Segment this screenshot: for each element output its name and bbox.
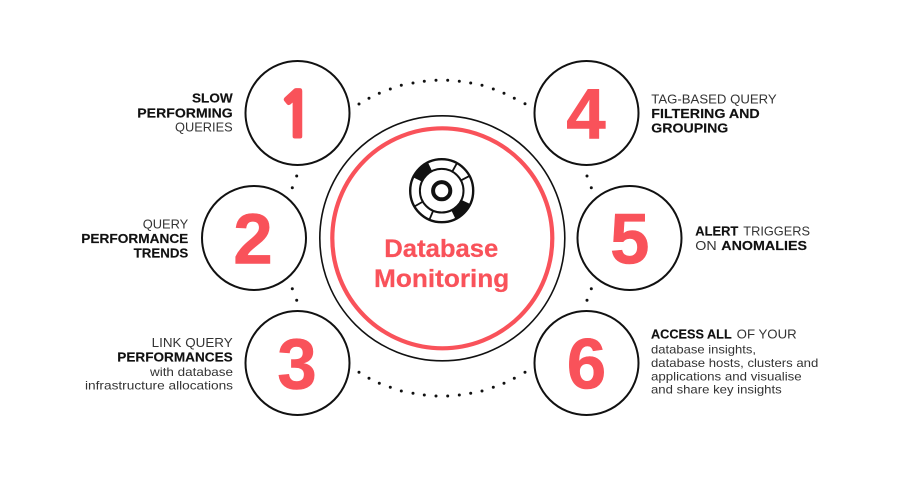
label 6: database hosts, clusters and xyxy=(651,356,818,370)
label 2 xyxy=(81,216,189,260)
label 3 xyxy=(85,335,233,392)
label 1 xyxy=(137,91,233,135)
label 5: ANOMALIES xyxy=(721,238,807,253)
number 3: 3 xyxy=(277,326,317,404)
label 6 xyxy=(651,326,818,397)
dotted arc: bottom xyxy=(358,371,526,398)
number 1: 1 xyxy=(277,86,315,147)
step 3 xyxy=(85,311,350,415)
title xyxy=(374,235,509,293)
step 1 xyxy=(137,61,350,165)
central hub xyxy=(320,116,565,361)
label 6: ACCESS ALL xyxy=(651,326,732,341)
label 1: SLOW xyxy=(192,91,233,106)
label 6: database insights, xyxy=(651,342,756,356)
label 1: QUERIES xyxy=(175,120,233,135)
number circle 4 xyxy=(534,61,638,165)
number 2: 2 xyxy=(233,200,273,279)
number circle 2 xyxy=(202,186,306,290)
number circle 6 xyxy=(534,311,638,415)
label 3: PERFORMANCES xyxy=(117,349,233,364)
label 4: GROUPING xyxy=(651,120,728,135)
label 6: OF YOUR xyxy=(737,326,797,341)
label 3: infrastructure allocations xyxy=(85,378,233,392)
label 1: PERFORMING xyxy=(137,105,233,120)
label 3: with database xyxy=(149,365,233,379)
label 5 xyxy=(695,224,810,253)
label 2: PERFORMANCE xyxy=(81,231,189,246)
title: Monitoring xyxy=(374,265,509,293)
number circle 3 xyxy=(246,311,350,415)
label 3: LINK QUERY xyxy=(152,335,233,350)
label 5: TRIGGERS xyxy=(743,224,810,239)
label 2: TRENDS xyxy=(134,245,189,260)
label 6: and share key insights xyxy=(651,383,782,397)
step 2 xyxy=(81,186,306,290)
icon: database monitor dial xyxy=(410,159,473,222)
number 5: 5 xyxy=(610,200,649,279)
label 4: TAG-BASED QUERY xyxy=(651,92,777,107)
title: Database xyxy=(384,235,498,263)
number 4: 4 xyxy=(566,75,606,154)
label 5: ALERT xyxy=(695,224,738,239)
dotted arc: top xyxy=(358,79,526,106)
label 2: QUERY xyxy=(143,216,189,231)
step 4 xyxy=(534,61,777,165)
label 5: ON xyxy=(695,238,717,253)
number 6: 6 xyxy=(567,326,606,404)
dotted connectors: left xyxy=(291,174,298,302)
number circle 5 xyxy=(578,186,682,290)
label 6: applications and visualise xyxy=(651,369,802,383)
dotted connectors: right xyxy=(586,174,593,302)
number circle 1 xyxy=(246,61,350,165)
step 6 xyxy=(534,311,818,415)
step 5 xyxy=(578,186,810,290)
label 4 xyxy=(651,92,777,135)
label 4: FILTERING AND xyxy=(651,106,760,121)
